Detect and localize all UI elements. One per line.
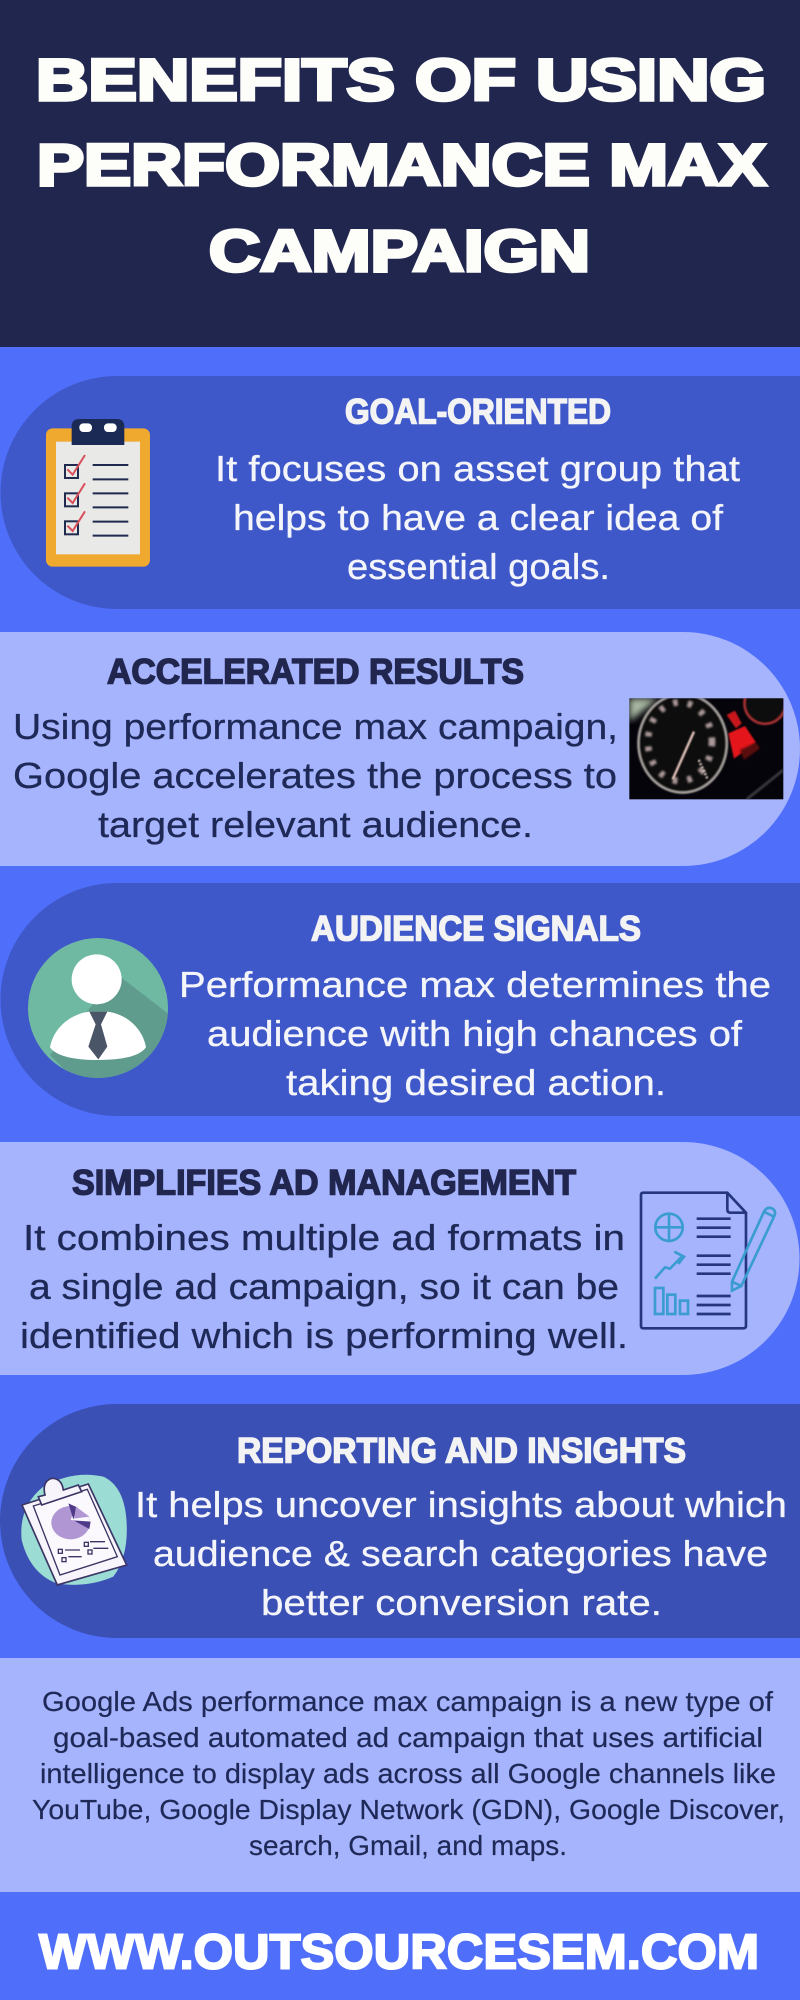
heading: AUDIENCE SIGNALS [311, 910, 641, 948]
title: CAMPAIGN [209, 219, 590, 284]
title: PERFORMANCE MAX [37, 133, 766, 198]
title [36, 48, 766, 284]
heading: SIMPLIFIES AD MANAGEMENT [72, 1164, 576, 1202]
icon: report document with pencil [641, 1193, 775, 1328]
text block: essential goals. [347, 546, 610, 587]
text block [179, 964, 771, 1103]
icon: report clipboard with pie chart [21, 1475, 127, 1585]
icon: person with tie [28, 938, 170, 1085]
text block: taking desired action. [286, 1062, 666, 1103]
text block: intelligence to display ads across all Google channels like [40, 1758, 776, 1789]
heading: ACCELERATED RESULTS [107, 652, 524, 692]
text block: better conversion rate. [261, 1582, 662, 1623]
text block: helps to have a clear idea of [233, 497, 724, 538]
text block: search, Gmail, and maps. [249, 1830, 567, 1861]
text block: a single ad campaign, so it can be [29, 1266, 619, 1307]
text block: target relevant audience. [98, 804, 533, 845]
text block: Performance max determines the [179, 964, 771, 1005]
text block: It helps uncover insights about which [135, 1484, 787, 1525]
footer website url: WWW.OUTSOURCESEM.COM [39, 1926, 759, 1980]
panel: summary [0, 1658, 800, 1892]
text block [135, 1484, 787, 1623]
panel: simplifies ad management [0, 1142, 800, 1375]
text block [20, 1217, 628, 1356]
text block: identified which is performing well. [20, 1315, 628, 1356]
panel: reporting and insights [0, 1404, 800, 1638]
header banner [0, 0, 800, 347]
text block: It combines multiple ad formats in [23, 1217, 625, 1258]
heading: GOAL-ORIENTED [345, 392, 611, 432]
text block: YouTube, Google Display Network (GDN), Google Discover, [32, 1794, 785, 1825]
text block: Using performance max campaign, [13, 706, 618, 747]
text block [13, 706, 618, 845]
panel: audience signals [1, 883, 800, 1116]
text block: It focuses on asset group that [215, 448, 740, 489]
panel: goal-oriented [1, 376, 800, 609]
text block: goal-based automated ad campaign that uses artificial [53, 1722, 763, 1753]
icon: checklist clipboard [46, 419, 150, 567]
text block [215, 448, 740, 587]
text block: Google accelerates the process to [13, 755, 617, 796]
title: BENEFITS OF USING [36, 48, 766, 113]
text block: audience with high chances of [207, 1013, 743, 1054]
text block: Google Ads performance max campaign is a new type of [42, 1686, 773, 1717]
heading: REPORTING AND INSIGHTS [237, 1432, 686, 1470]
panel: accelerated results [0, 632, 800, 866]
text block: audience & search categories have [153, 1533, 768, 1574]
text block [32, 1686, 785, 1861]
icon: speedometer photo [629, 698, 784, 800]
